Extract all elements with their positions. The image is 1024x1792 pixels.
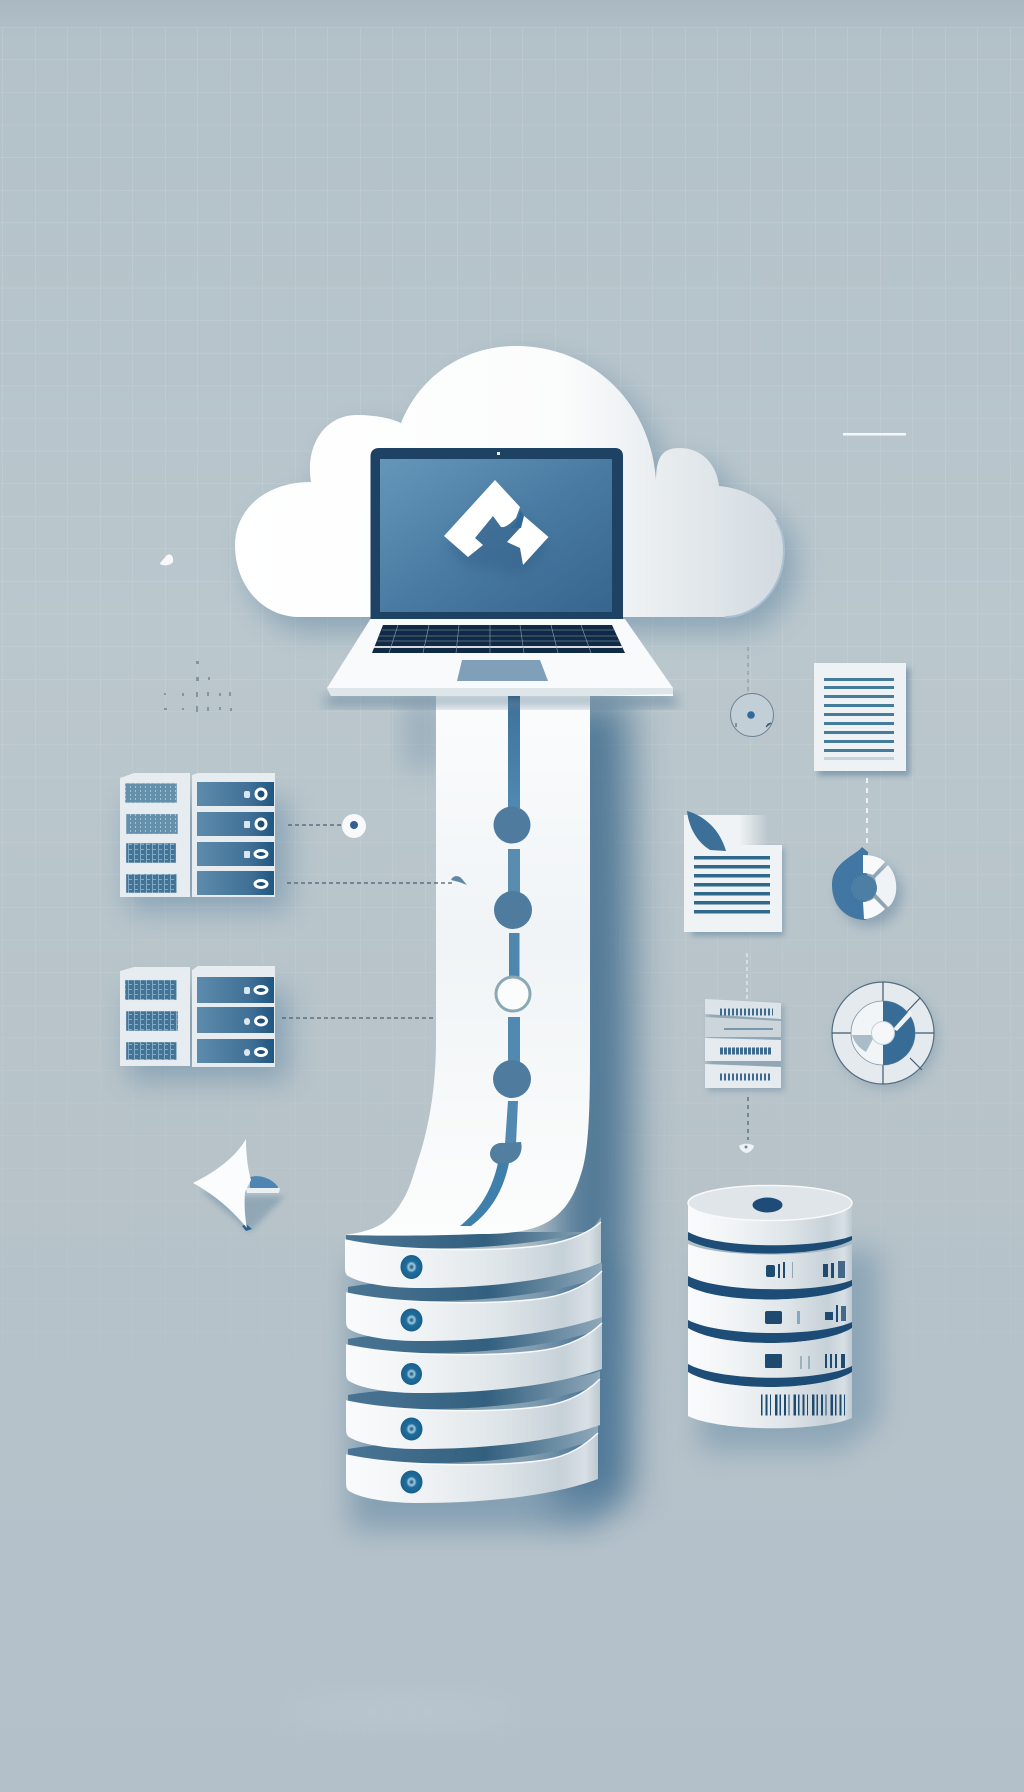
shadow: ribbon and stack right bbox=[555, 700, 632, 1510]
connector dash rack 2 bbox=[282, 1017, 436, 1019]
cloud shadow bbox=[247, 360, 796, 631]
barcode disk 2 bbox=[766, 1261, 845, 1278]
laptop lid bbox=[370, 448, 623, 620]
wheel outer ring bbox=[832, 982, 934, 1084]
wheel shadow bbox=[836, 987, 938, 1089]
doc 1 shadow bbox=[818, 668, 910, 776]
small white blob left bbox=[160, 554, 173, 565]
faint bottom glow bbox=[280, 1696, 520, 1728]
rack 2 right panels bbox=[197, 977, 274, 1063]
screen logo bbox=[444, 480, 548, 565]
disk 3 body bbox=[688, 1286, 852, 1333]
dashed connector document to pie bbox=[866, 778, 868, 847]
rack 1 left panels bbox=[125, 783, 178, 893]
screen logo shadow bbox=[446, 490, 550, 575]
wheel spokes bbox=[832, 982, 934, 1084]
doc 2 shadow bbox=[692, 848, 784, 936]
rack 2 indicators bbox=[244, 987, 250, 1056]
laptop screen bbox=[380, 459, 612, 612]
doc 2 sheet lower bbox=[684, 845, 782, 932]
timeline segment 1 bbox=[508, 695, 520, 808]
wheel grey wedge bbox=[852, 1035, 875, 1052]
disk 5 band bbox=[688, 1360, 852, 1387]
disk 3 band bbox=[688, 1274, 852, 1300]
timeline tail bbox=[460, 1163, 509, 1226]
doc 1 sheet bbox=[814, 663, 906, 771]
stack icon shadow bbox=[708, 1005, 784, 1091]
main database stack bbox=[345, 1217, 620, 1530]
small stacked record icon bbox=[705, 999, 784, 1091]
disk 2 band bbox=[688, 1228, 852, 1254]
timeline segment 4 bbox=[508, 1017, 520, 1064]
doc 2 lines bbox=[694, 856, 770, 914]
document 2 bbox=[684, 811, 784, 936]
server rack group 2 bbox=[120, 966, 288, 1080]
timeline node 2 bbox=[494, 891, 532, 929]
faint dot grid bbox=[164, 661, 232, 712]
node: small round marker bbox=[342, 814, 366, 838]
stray dash top right bbox=[843, 433, 906, 436]
timeline segment 5 bbox=[505, 1101, 518, 1144]
background grid bbox=[0, 27, 1024, 1076]
wheel inner white disc bbox=[851, 1001, 915, 1065]
laptop shadow bbox=[322, 694, 680, 706]
timeline node 3 ring bbox=[496, 977, 530, 1011]
dashed connector to pin bbox=[747, 1097, 749, 1140]
rack 1 right column bbox=[192, 773, 275, 897]
cloud rim bbox=[725, 520, 784, 617]
top cap lid bbox=[688, 1186, 852, 1220]
small pin marker bbox=[739, 1144, 754, 1153]
dashed connector above stack icon bbox=[746, 953, 748, 1000]
laptop base bbox=[327, 619, 673, 696]
panel: cloud bbox=[235, 346, 796, 631]
ribbon sheet bbox=[345, 695, 590, 1236]
record rows bbox=[705, 999, 781, 1019]
stack shadow bbox=[350, 1260, 620, 1530]
wheel light slash bbox=[893, 1010, 913, 1031]
panel: data ribbon bbox=[345, 695, 590, 1236]
wheel blue half bbox=[883, 1001, 915, 1065]
pie hub bbox=[851, 875, 877, 901]
laptop camera bbox=[497, 452, 500, 455]
disk 4 bbox=[346, 1371, 600, 1449]
pie shadow bbox=[838, 862, 902, 926]
base front lip bbox=[327, 688, 673, 696]
dashed connector top right bbox=[747, 647, 749, 693]
trackpad bbox=[457, 660, 548, 681]
pie white slices bbox=[863, 855, 885, 875]
wheel chart bbox=[832, 982, 938, 1089]
disk 4 band bbox=[688, 1316, 852, 1343]
pie blue half bbox=[832, 847, 868, 920]
connector dashes rack 1 bbox=[287, 825, 452, 883]
barcode disk 5 bbox=[761, 1394, 846, 1416]
secondary stack shadow bbox=[700, 1250, 880, 1450]
cloud body bbox=[235, 346, 784, 617]
disk 4 body bbox=[688, 1328, 852, 1378]
disk 2 body bbox=[688, 1244, 852, 1289]
disk 1 bbox=[345, 1217, 601, 1288]
doc 2 sheet upper fade bbox=[684, 815, 768, 845]
panel: laptop bbox=[322, 448, 680, 706]
server rack group 1 bbox=[120, 773, 288, 910]
top cap body bbox=[688, 1202, 852, 1245]
wheel hub bbox=[872, 1022, 894, 1044]
disk 5 body bbox=[688, 1372, 852, 1428]
timeline node 4 bbox=[493, 1060, 531, 1098]
disk 5 bbox=[346, 1425, 598, 1503]
rack 2 left panels bbox=[125, 980, 178, 1060]
arrow icon bbox=[193, 1139, 285, 1232]
rack 1 knobs bbox=[255, 789, 267, 888]
rack 1 right panels bbox=[197, 782, 274, 895]
drop pie chart bbox=[832, 847, 902, 926]
timeline node 1 bbox=[494, 806, 530, 844]
top cap knob bbox=[752, 1198, 782, 1212]
rack 1 left column bbox=[120, 773, 190, 897]
small dial icon bbox=[730, 694, 774, 736]
document 1 bbox=[814, 663, 910, 776]
rack 2 shadow bbox=[128, 990, 288, 1080]
secondary database stack bbox=[688, 1186, 880, 1450]
doc 2 leaf bbox=[687, 811, 726, 851]
rack 2 left column bbox=[120, 967, 190, 1066]
timeline node 5 bbox=[490, 1142, 522, 1164]
ribbon pin bbox=[451, 876, 467, 885]
disk buttons bbox=[401, 1256, 422, 1493]
rack 2 right column bbox=[192, 966, 275, 1067]
rack 1 shadow bbox=[128, 800, 288, 910]
doc 1 lines bbox=[824, 678, 894, 760]
rack 2 knobs bbox=[255, 986, 267, 1056]
rack 1 indicators bbox=[244, 791, 250, 858]
disk 3 bbox=[346, 1315, 602, 1393]
timeline segment 2 bbox=[508, 849, 520, 894]
shadow: under laptop left bbox=[405, 698, 441, 768]
keyboard bbox=[372, 625, 625, 653]
disk 2 bbox=[346, 1263, 602, 1341]
timeline segment 3 bbox=[509, 933, 520, 977]
barcode disk 4 bbox=[765, 1354, 845, 1369]
barcode disk 3 bbox=[765, 1305, 846, 1324]
record marks bbox=[720, 1012, 773, 1077]
